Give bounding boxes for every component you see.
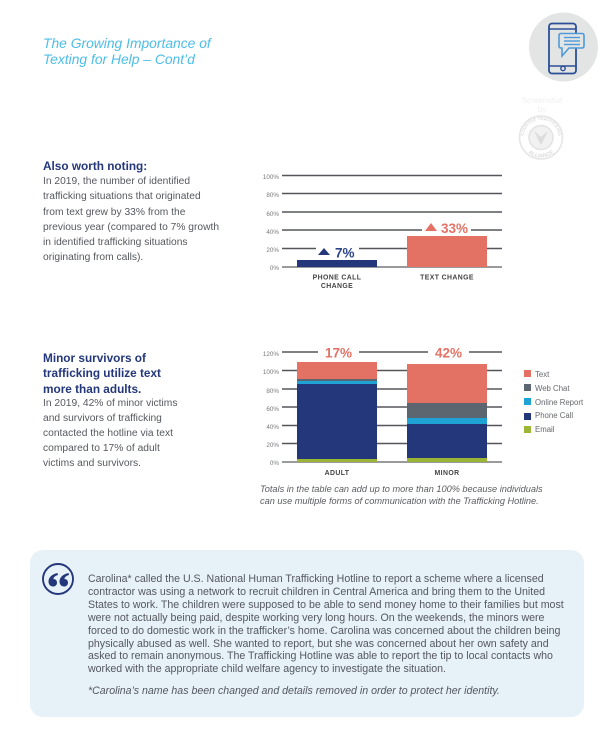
body text: growth in text: previous year (compared to 7% growth xyxy=(43,222,219,233)
body text: growth in text: originating from calls). xyxy=(43,252,143,263)
quote text: Carolina* called the U.S. National Human Trafficking Hotline to report a scheme where a licensed xyxy=(88,573,544,585)
stacked bar: minor xyxy=(407,344,487,477)
watermark: screenshot credit: ALLIANCE xyxy=(528,150,554,158)
quote text: physically abused as well. She wanted to report, but she was concerned about her own safety and xyxy=(88,638,549,650)
bar chart: change by contact method: 0% xyxy=(270,265,279,272)
legend: Phone Call xyxy=(535,411,573,420)
quote text: asked to remain anonymous. The Trafficking Hotline was able to report the tip to local contacts who xyxy=(88,650,553,662)
title xyxy=(43,35,212,67)
chart footnote xyxy=(260,484,543,506)
stacked bar: minor: MINOR xyxy=(435,470,459,477)
body text: growth in text: from text grew by 33% from the xyxy=(43,207,185,218)
body text: minor vs adult: In 2019, 42% of minor victims xyxy=(43,398,177,409)
stacked bar chart: contact method by age: 80% xyxy=(266,388,279,395)
heading: minor survivors: more than adults. xyxy=(43,382,141,396)
stacked bar chart: contact method by age: 40% xyxy=(266,424,279,431)
bar: phone call change xyxy=(297,240,377,290)
watermark: screenshot credit: by xyxy=(538,105,546,114)
bar: text change xyxy=(407,221,487,282)
stacked bar: adult xyxy=(297,344,377,477)
bar: text change: 33% xyxy=(441,221,468,236)
panel: Carolina story xyxy=(30,550,584,717)
quote text: worked with the appropriate child welfare agency to investigate the situation. xyxy=(88,663,446,675)
quote text: were not actually being paid, despite working very long hours. On the weekends, the minors were xyxy=(88,612,544,624)
quote text: forced to do domestic work in the trafficker’s home. Carolina was concerned about the children being xyxy=(88,625,560,637)
stacked bar chart: contact method by age: 100% xyxy=(263,369,279,376)
stacked bar chart: contact method by age: 0% xyxy=(270,460,279,467)
watermark: screenshot credit: COUNTER TRAFFICKING xyxy=(520,117,561,136)
legend xyxy=(524,370,584,434)
bar chart: change by contact method: 100% xyxy=(263,174,279,181)
heading: minor survivors: Minor survivors of xyxy=(43,350,146,364)
body text: minor vs adult: compared to 17% of adult xyxy=(43,443,160,454)
quote text: contractor was using a network to recruit children in Central America and bring them to the United xyxy=(88,586,545,598)
stacked bar chart: contact method by age: 20% xyxy=(266,442,279,449)
title: The Growing Importance of xyxy=(43,35,211,51)
icon: quotation mark xyxy=(42,563,74,595)
body text: minor vs adult: and survivors of trafficking xyxy=(43,413,162,424)
body text: growth in text xyxy=(43,176,219,263)
legend: Text xyxy=(535,370,550,379)
body text: growth in text: in identified trafficking situations xyxy=(43,237,188,248)
bar: text change: TEXT CHANGE xyxy=(420,274,474,282)
stacked bar: minor: 42% xyxy=(435,346,462,360)
quote text: States to work. The children were supposed to be able to send money home to their families but most xyxy=(88,599,564,611)
bar chart: change by contact method: 20% xyxy=(266,247,279,254)
stacked bar chart: contact method by age xyxy=(263,346,584,477)
stacked bar: adult: ADULT xyxy=(325,470,350,477)
stacked bar chart: contact method by age: 120% xyxy=(263,351,279,358)
title: Texting for Help – Cont’d xyxy=(43,51,195,67)
chart footnote: can use multiple forms of communication with the Trafficking Hotline. xyxy=(260,496,539,506)
body text: minor vs adult xyxy=(43,398,178,469)
watermark: screenshot credit xyxy=(518,96,564,160)
bar chart: change by contact method: 40% xyxy=(266,229,279,236)
stacked bar chart: contact method by age: 60% xyxy=(266,406,279,413)
text block: minor survivors xyxy=(43,350,178,469)
bar chart: change by contact method: 60% xyxy=(266,211,279,218)
body text: minor vs adult: victims and survivors. xyxy=(43,458,141,469)
body text: growth in text: In 2019, the number of identified xyxy=(43,176,190,187)
icon: phone with speech bubble xyxy=(529,12,598,82)
legend: Online Report xyxy=(535,398,584,407)
heading: minor survivors xyxy=(43,350,161,396)
bar: phone call change: PHONE CALL xyxy=(313,274,361,282)
quote footnote: *Carolina’s name has been changed and details removed in order to protect her identity. xyxy=(88,684,500,696)
text block: also worth noting xyxy=(43,158,219,263)
stacked bar: adult: 17% xyxy=(325,346,352,360)
watermark: screenshot credit: Screenshot xyxy=(522,96,563,105)
bar: phone call change: 7% xyxy=(335,246,355,260)
body text: growth in text: trafficking situations that originated xyxy=(43,191,201,202)
heading: also worth noting: Also worth noting: xyxy=(43,158,147,172)
chart footnote: Totals in the table can add up to more than 100% because individuals xyxy=(260,484,543,494)
legend: Web Chat xyxy=(535,384,570,393)
bar chart: change by contact method xyxy=(263,174,502,290)
bar chart: change by contact method: 80% xyxy=(266,192,279,199)
quote text xyxy=(88,573,564,675)
body text: minor vs adult: contacted the hotline via text xyxy=(43,428,173,439)
legend: Email xyxy=(535,425,555,434)
bar: phone call change: CHANGE xyxy=(321,283,353,290)
heading: minor survivors: trafficking utilize text xyxy=(43,366,161,380)
